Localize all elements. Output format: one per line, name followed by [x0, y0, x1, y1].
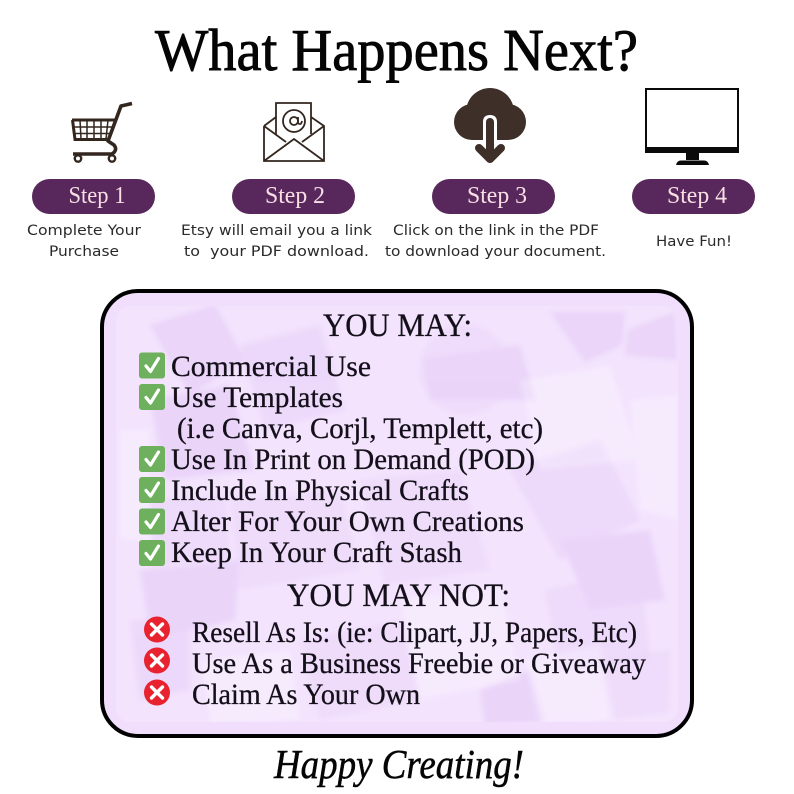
step 1: Purchase [49, 244, 119, 260]
icon: shopping cart [72, 104, 132, 162]
heading: you may: YOU MAY: [323, 308, 472, 344]
allowed item: alter: Alter For Your Own Creations [171, 505, 524, 538]
step 3 [385, 179, 606, 260]
allowed item: physical crafts: Include In Physical Crafts [171, 474, 469, 507]
step 1: Step 1 [68, 183, 126, 209]
step 4: Step 4 [667, 183, 727, 209]
forbidden item: resell: Resell As Is: (ie: Clipart, JJ, Papers, Etc) [192, 616, 637, 649]
allowed item: commercial use: Commercial Use [171, 350, 371, 383]
closing message: Happy Creating! [273, 741, 524, 787]
step 2: Etsy will email you a link [181, 223, 373, 239]
step 2: to your PDF download. [184, 244, 369, 260]
allowed item: use templates: Use Templates [171, 381, 343, 414]
icon: cloud download [454, 88, 526, 159]
step 4: Have Fun! [656, 234, 732, 250]
step 3: to download your document. [385, 244, 606, 260]
icon: computer monitor [645, 89, 739, 165]
step 1 [27, 179, 155, 260]
allowed item: use templates: (i.e Canva, Corjl, Templett, etc) [177, 412, 543, 445]
step 3: Click on the link in the PDF [393, 223, 599, 239]
icon: email envelope [264, 103, 324, 161]
forbidden item: claim: Claim As Your Own [192, 678, 420, 711]
forbidden item: freebie: Use As a Business Freebie or Giveaway [192, 647, 646, 680]
allowed item: print on demand: Use In Print on Demand (POD) [171, 443, 535, 476]
panel: licence terms [102, 291, 692, 736]
title: What Happens Next? [155, 17, 638, 83]
step 4 [632, 179, 755, 250]
step 2: Step 2 [265, 183, 325, 209]
step 2 [181, 179, 373, 260]
step 1: Complete Your [27, 223, 141, 239]
allowed item: use templates [139, 381, 543, 445]
step 3: Step 3 [467, 183, 527, 209]
heading: you may not: YOU MAY NOT: [287, 578, 510, 614]
allowed item: craft stash: Keep In Your Craft Stash [171, 536, 462, 569]
